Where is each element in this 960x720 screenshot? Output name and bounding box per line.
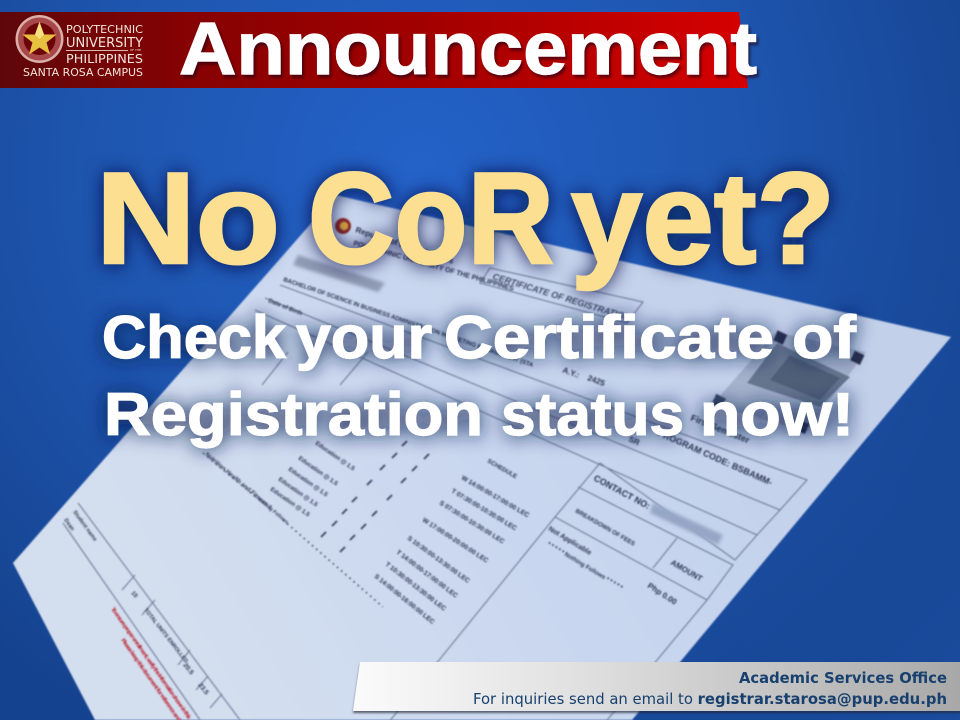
title: Announcement: Announcement [179,7,757,90]
document schedule rows: T 07:30:00-10:30:00 LEC [450,488,518,532]
document schedule rows: T 10:30:00-13:30:00 LEC [384,561,447,613]
document totals and red note: To ensure proper enrollment, verify the information shown in this [109,607,192,720]
document QR code [712,330,866,434]
document text labels: Php 0.00 [646,581,679,607]
document text labels: POLYTECHNIC UNIVERSITY OF THE PHILIPPINES [352,240,515,293]
document subject rows: Education @ 1.5 [277,477,319,509]
header red bar [0,12,748,88]
document redaction blocks [293,255,723,545]
university name: OF THE [130,48,141,52]
subheading: check your certificate [102,304,857,448]
headline: No CoR yet?: yet? [571,145,835,291]
document text labels: PROGRAM CODE: BSBAMM- [656,428,774,487]
document text labels: BREAKDOWN OF FEES [574,509,636,548]
headline: No CoR yet?: CoR [308,145,554,291]
university name: SANTA ROSA CAMPUS [23,66,143,79]
subheading line 1: Certificate [444,304,774,371]
document text labels: AMOUNT [669,558,704,583]
document subject rows: Education @ 1.5 [269,487,311,519]
header banner [0,7,757,90]
document text labels: Republic of the Philippines [354,225,455,266]
document totals and red note: TOTAL UNITS ENROLLED [142,608,189,664]
document totals and red note: 15 [129,590,139,600]
footer card background [353,662,960,711]
document text labels: Date of Birth [267,298,303,317]
footer inquiry line: For inquiries send an email to registrar.starosa@pup.edu.ph [473,690,947,708]
footer contact card [353,662,960,711]
icon: university seal [16,15,64,63]
document schedule rows: S 10:30:00-13:30:00 LEC [406,535,471,585]
document table lines [63,268,807,720]
document schedule rows: S 14:00:00-16:00:00 LEC [373,573,436,626]
headline: No CoR yet?: No [96,145,280,291]
document sheet [13,195,951,720]
document totals and red note [62,510,210,720]
document text labels: BACHELOR OF SCIENCE IN BUSINESS ADMINISTRATION MARKETING MANAGEMENT (STA [282,277,534,369]
document schedule rows: T 14:00:00-17:00:00 LEC [395,549,459,600]
document text labels: * * * * * Nothing Follows * * * * * [546,542,624,592]
university name [23,23,143,79]
document schedule rows: S 07:30:00-10:30:00 LEC [438,500,506,546]
document subject rows: Nothing Follows [256,496,290,526]
document schedule rows [373,475,530,626]
document text labels [267,225,774,607]
document text labels: SR [627,435,641,447]
footer office name: Academic Services Office [739,669,947,687]
document text labels: CONTACT NO: [592,473,652,511]
subheading line 1 [102,304,857,371]
document totals and red note: Dean [62,518,76,533]
subheading line 1: your [296,304,432,371]
document subject rows: Education @ 1.5 [314,441,356,473]
document text labels: CERTIFICATE OF REGISTRATION [491,271,632,323]
subheading line 1: Check [102,304,287,371]
document seal [335,218,351,234]
subheading line 1: of [792,304,857,371]
document text labels: A.Y.: [561,365,581,380]
subheading line 2: status [501,381,684,448]
document text labels: First Semester [689,413,751,445]
university name: POLYTECHNIC [66,23,143,36]
document subject rows: Nutrition Health and Fitness 1 [204,452,273,512]
document text labels: Not Applicable [547,526,592,557]
university name: UNIVERSITY [66,36,143,51]
subheading line 2 [104,381,854,448]
document subject rows: Education @ 1.5 [287,467,329,499]
document totals and red note: Student name [71,510,98,543]
document totals and red note: 20.5 [181,662,195,677]
subheading line 2: Registration [104,381,483,448]
document text labels: SCHEDULE [486,459,518,480]
document subject rows [203,441,429,607]
subheading line 2: now! [700,381,854,448]
document subject rows: Education @ 1.5 [297,456,339,488]
document: blurred certificate of registration [13,195,951,720]
university name: PHILIPPINES [66,51,143,66]
headline: No CoR yet? [96,145,835,291]
document text labels: 2425 [586,373,607,388]
document schedule rows: W 14:00:00-17:00:00 LEC [460,475,530,519]
document totals and red note: 23.5 [196,682,210,697]
document schedule rows: W 17:00:00-20:00:00 LEC [421,517,490,565]
